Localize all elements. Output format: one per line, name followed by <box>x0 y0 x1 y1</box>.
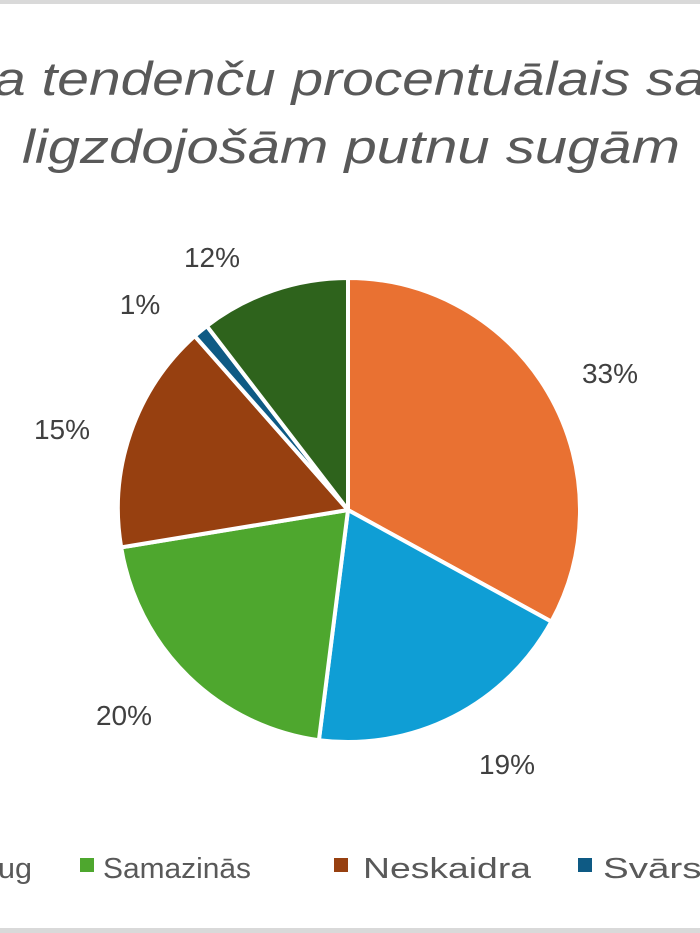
slice: brown 15% <box>118 336 348 547</box>
slice: blue 19% <box>319 510 551 742</box>
legend: Samazinās <box>103 853 251 885</box>
pie chart <box>118 278 580 742</box>
legend: Neskaidra <box>363 853 532 885</box>
data labels: 12% <box>184 242 240 273</box>
data labels: 33% <box>582 358 638 389</box>
data labels: 15% <box>34 414 90 445</box>
title: ligzdojošām putnu sugām <box>22 120 680 173</box>
slice: dark green 12% <box>207 278 348 510</box>
slice: dark blue 1% <box>195 326 348 510</box>
title: a tendenču procentuālais sa <box>0 52 700 105</box>
data labels <box>34 242 638 780</box>
title <box>0 52 700 173</box>
slice: green 20% <box>121 510 348 740</box>
data labels: 19% <box>479 749 535 780</box>
legend <box>0 853 700 885</box>
data labels: 20% <box>96 700 152 731</box>
slice: orange 33% <box>348 278 580 622</box>
data labels: 1% <box>120 289 160 320</box>
